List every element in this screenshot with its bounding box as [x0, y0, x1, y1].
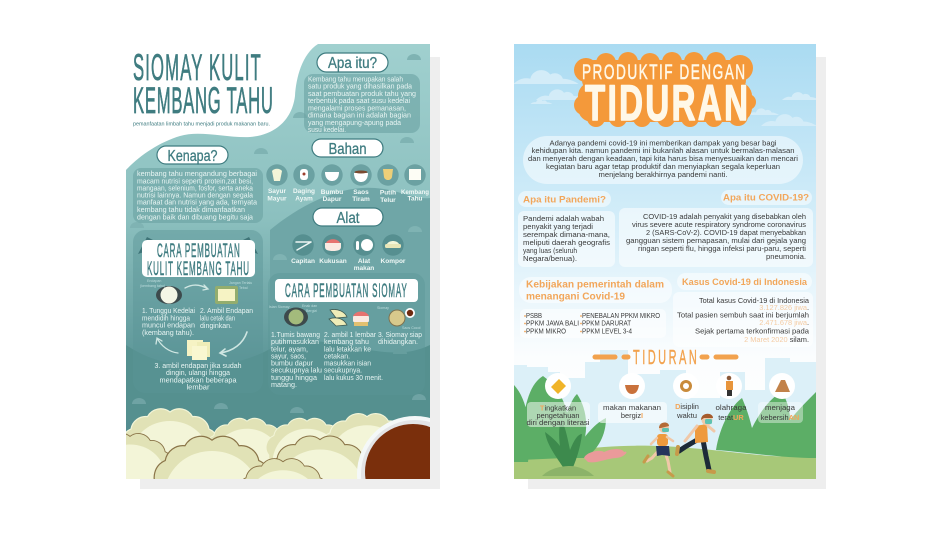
icon: siomay with sauce [389, 308, 415, 326]
heading: bahan: Bahan [328, 141, 366, 158]
small callouts [269, 304, 421, 330]
ingredient labels: Ayam [295, 196, 313, 202]
banner title: CARA PEMBUATAN [157, 241, 240, 262]
case statistics: Sejak pertama terkonfirmasi pada [695, 326, 810, 336]
small callouts: Endapan [147, 279, 161, 283]
panel: cara pembuatan kulit [133, 230, 263, 393]
step 3: mendapatkan beberapa [160, 378, 237, 384]
icon: steamer [353, 312, 369, 326]
step 2: dinginkan. [200, 323, 232, 330]
text block: apa itu: terbentuk pada saat susu kedelai [308, 98, 410, 105]
icon: square tofu [215, 286, 238, 304]
policy list: PENEBALAN PPKM MIKRO [582, 311, 660, 320]
step 1: telur, ayam, [271, 346, 308, 354]
ingredient labels: Sayur [268, 188, 286, 195]
text block: kenapa: kembang tahu mengandung berbagai [137, 171, 257, 178]
panel shadows [140, 57, 826, 489]
title [134, 54, 272, 114]
intro text: kegiatan baru agar tetap produktif dan menyiapkan segala keperluan [546, 162, 780, 171]
text block: covid: gangguan sistem pernapasan, mulai dari gejala yang [626, 236, 806, 245]
text block: pandemi [518, 211, 615, 267]
text block: kenapa: kembang tahu tidak dimanfaatkan [137, 207, 245, 214]
ingredient labels: Telur [380, 197, 396, 204]
text block: covid: COVID-19 adalah penyakit yang disebabkan oleh [643, 212, 806, 221]
heading: apa itu pandemi: Apa itu Pandemi? [523, 194, 606, 206]
step 3: 3. Siomay siap [378, 332, 422, 339]
heading: kenapa: Kenapa? [168, 148, 218, 165]
text block: apa itu: Kembang tahu merupakan salah [308, 76, 403, 84]
ribbon [138, 237, 258, 254]
step 3 [378, 332, 422, 346]
step 3: 3. ambil endapan jika sudah [154, 363, 242, 370]
intro text: dan menyerah dengan keadaan, tapi kita harus bisa menyesuaikan dan mencari [528, 154, 798, 163]
ingredient labels: Tahu [407, 196, 423, 202]
text block: apa itu [304, 74, 420, 134]
step 3: lembar [186, 384, 210, 392]
step 1: matang. [271, 382, 297, 389]
text block: covid: pneumonia. [766, 252, 806, 261]
title: SIOMAY KULIT [133, 48, 261, 89]
small callouts: Saos Cocol [402, 326, 421, 330]
teal background blob [126, 44, 430, 432]
step 2 [324, 332, 383, 382]
activity labels: waktu [676, 411, 697, 420]
text block: covid: 2 (SARS-CoV-2). COVID-19 dapat menyebabkan [646, 228, 806, 237]
step 2: 2. ambil 1 lembar [324, 332, 377, 339]
step 1: 1. Tunggu Kedelai [142, 308, 195, 315]
heading: kebijakan: Kebijakan pemerintah dalam [526, 280, 664, 290]
activity labels: pengetahuan [536, 411, 580, 420]
step 1: mendidih hingga [142, 316, 190, 322]
panel: siomay kulit kembang tahu [126, 44, 430, 479]
text block: apa itu: satu produk yang dihasilkan pada [308, 84, 412, 91]
step 3: dihidangkan. [378, 339, 418, 346]
ingredient labels: Saos [353, 189, 369, 196]
city skyline [514, 350, 816, 460]
text block: pandemi: penyakit yang terjadi [523, 222, 593, 231]
policy list: PPKM DARURAT [582, 318, 631, 328]
panel: produktif dengan tiduran [514, 44, 819, 479]
heading: bahan [312, 139, 383, 158]
activity labels: teratUR [718, 413, 744, 422]
heading: apa itu pandemi [518, 191, 611, 207]
ingredient labels: Dapur [323, 196, 342, 203]
step 1 [142, 308, 195, 337]
ingredient labels [268, 188, 429, 202]
text block: pandemi: serempak dimana-mana, [523, 230, 610, 239]
activity labels: olahraga [716, 403, 747, 412]
title: PRODUKTIF DENGAN [582, 60, 745, 84]
tool labels: Kukusan [319, 258, 347, 265]
small callouts: (kembang tahu) [140, 284, 165, 288]
activity labels [526, 402, 803, 427]
small callouts: Siomay [377, 306, 389, 310]
pink shrubs [584, 449, 626, 462]
case statistics: 3.127.826 jiwa. [759, 303, 809, 312]
ingredient labels: Daging [293, 188, 315, 195]
ingredient labels: Bumbu [321, 189, 343, 196]
step 1 [271, 332, 322, 389]
text block: covid: virus severe acute respiratory syndrome coronavirus [632, 220, 806, 229]
ground [514, 446, 816, 479]
policy list: PPKM MIKRO [526, 326, 566, 336]
small callouts: Isian Siomay [269, 305, 290, 309]
tool labels: makan [354, 265, 374, 272]
text block: kenapa: nutrisi lainnya. Namun dengan segala [137, 192, 253, 200]
activity labels: Tingkatkan [540, 404, 576, 412]
step 1: sayur, saos, [271, 354, 306, 360]
activity icons [545, 373, 795, 399]
icon: wrappers [329, 309, 347, 326]
runner: man [677, 414, 714, 472]
step 2: lalu kukus 30 menit. [324, 375, 383, 382]
small callouts: Jangan Terlalu [229, 281, 252, 285]
ingredient icons [266, 164, 426, 186]
icon: pot with endapan [156, 286, 182, 304]
activity labels: bergizI [621, 411, 643, 420]
heading: alat [313, 208, 383, 227]
left bushes [514, 376, 606, 462]
ingredient labels: Kembang [401, 189, 429, 196]
policy list [520, 309, 666, 338]
text block: pandemi: meliputi daerah geografis [523, 238, 610, 247]
step 2: cetakan. [324, 354, 350, 360]
step 1: tunggu hingga [271, 375, 317, 382]
tiduran heading: TIDURAN [633, 347, 697, 369]
activity labels: makan makanan [603, 403, 661, 412]
small callouts: Tebal [239, 286, 248, 290]
activity labels: menjaga [765, 403, 796, 412]
heading: apa itu covid [721, 190, 812, 205]
bowl of sauce [357, 416, 430, 479]
clouds [514, 70, 819, 126]
runner: woman [644, 422, 673, 476]
case statistics: Total kasus Covid-19 di Indonesia [699, 296, 810, 305]
heading: alat: Alat [336, 210, 360, 227]
icon: wok filling [284, 308, 308, 326]
activity labels: diri dengan literasi [526, 418, 590, 427]
heading: kebijakan: menangani Covid-19 [526, 292, 625, 302]
step 1: secukupnya lalu [271, 368, 322, 374]
step 2: secukupnya. [324, 368, 362, 374]
dumplings [126, 408, 392, 479]
text block: kenapa: manfaat dan nutrisi yang ada, ternyata [137, 200, 257, 207]
step 1: 1.Tumis bawang [271, 332, 320, 339]
step 2 [200, 308, 253, 330]
case statistics: 2.471.678 jiwa. [759, 318, 809, 327]
activity labels: kebersihAN [761, 413, 799, 422]
text block: pandemi: Negara/benua). [523, 254, 577, 263]
policy list: PPKM LEVEL 3-4 [582, 326, 632, 336]
panel: cara pembuatan siomay [268, 273, 425, 395]
text block: kenapa: macam nutrisi seperti protein,zat besi, [137, 178, 253, 185]
text block: kenapa [133, 168, 263, 223]
tool icons [292, 234, 404, 256]
arrows between steps [156, 285, 247, 356]
small callouts [140, 280, 252, 289]
intro text: Adanya pandemi covid-19 ini memberikan dampak yang besar bagi [550, 138, 777, 148]
subtitle: pemanfaatan limbah tahu menjadi produk makanan baru. [133, 122, 270, 128]
step 2: lalu letakkan ke [324, 346, 371, 354]
lower decorative domes [132, 348, 426, 413]
title blob [574, 52, 756, 127]
case statistics: 2 Maret 2020 silam. [744, 335, 809, 344]
right bushes [716, 392, 816, 458]
intro text [523, 136, 803, 184]
policy list: PPKM JAWA BALI [526, 318, 579, 328]
decorative domes [130, 54, 422, 260]
tool labels: Capitan [291, 258, 315, 265]
heading: apa itu: Apa itu? [328, 55, 377, 72]
step 2: masukkan isian [324, 360, 371, 368]
small callouts: Bergizi [306, 309, 317, 313]
case statistics [673, 292, 813, 347]
small plant [542, 420, 594, 476]
text block: apa itu: susu kedelai. [308, 127, 346, 134]
text block: pandemi: yang luas (seluruh [523, 246, 577, 255]
activity labels: Disiplin [675, 402, 699, 411]
heading: kebijakan [519, 277, 672, 303]
step 3: dingin, ulangi hingga [166, 370, 230, 377]
text block: covid [619, 208, 813, 267]
title [574, 52, 756, 131]
text block: apa itu: mengalami proses pemanasan, [308, 106, 406, 112]
text block: pandemi: Pandemi adalah wabah [523, 214, 604, 223]
step 1: muncul endapan [142, 322, 195, 330]
background hills [126, 188, 430, 366]
step 1: bumbu dapur [271, 360, 314, 368]
step 3 [154, 363, 242, 392]
tool labels: Alat [358, 258, 371, 265]
intro text: menjelang berakhirnya pandemi nanti. [598, 170, 728, 179]
step 2: lalu cetak dan [200, 316, 235, 322]
tool labels: Kompor [381, 258, 406, 265]
title: KEMBANG TAHU [133, 81, 273, 122]
banner title [142, 240, 255, 280]
heading: apa itu covid: Apa itu COVID-19? [723, 192, 809, 204]
ingredient labels: Tiram [352, 196, 370, 203]
text block: apa itu: dimana bagian ini adalah bagian [308, 113, 411, 120]
tool labels [291, 258, 406, 270]
icon: tofu sheets [187, 340, 210, 360]
heading: kasus: Kasus Covid-19 di Indonesia [682, 277, 808, 288]
text block: kenapa: dengan baik dan dibuang begitu saja [137, 214, 253, 221]
case statistics: Total pasien sembuh saat ini berjumlah [677, 310, 809, 320]
intro text: kehidupan kita. namun pandemi ini bukanlah alasan untuk bermalas-malasan [532, 146, 794, 155]
title: TIDURAN [585, 75, 748, 131]
text block: apa itu: yang mengapung-apung pada [308, 120, 401, 127]
step 2: 2. Ambil Endapan [200, 308, 253, 315]
ingredient labels: Mayur [267, 196, 287, 202]
text block: apa itu: saat pembuatan produk tahu yang [308, 91, 416, 98]
step 1: (kembang tahu). [142, 330, 194, 337]
ingredient labels: Putih [380, 190, 396, 196]
banner title: CARA PEMBUATAN SIOMAY [285, 281, 407, 302]
step 2: kembang tahu [324, 339, 369, 346]
step 1: putihmasukkan [271, 339, 319, 346]
policy list: PSBB [526, 311, 542, 320]
heading: kasus [677, 273, 812, 290]
small callouts: Enak dan [302, 304, 317, 308]
text block: kenapa: mangaan, selenium, fosfor, serta aneka [137, 185, 253, 192]
banner title: KULIT KEMBANG TAHU [147, 259, 249, 280]
text block: covid: ringan seperti flu, hingga infeksi paru-paru, seperti [638, 244, 806, 253]
